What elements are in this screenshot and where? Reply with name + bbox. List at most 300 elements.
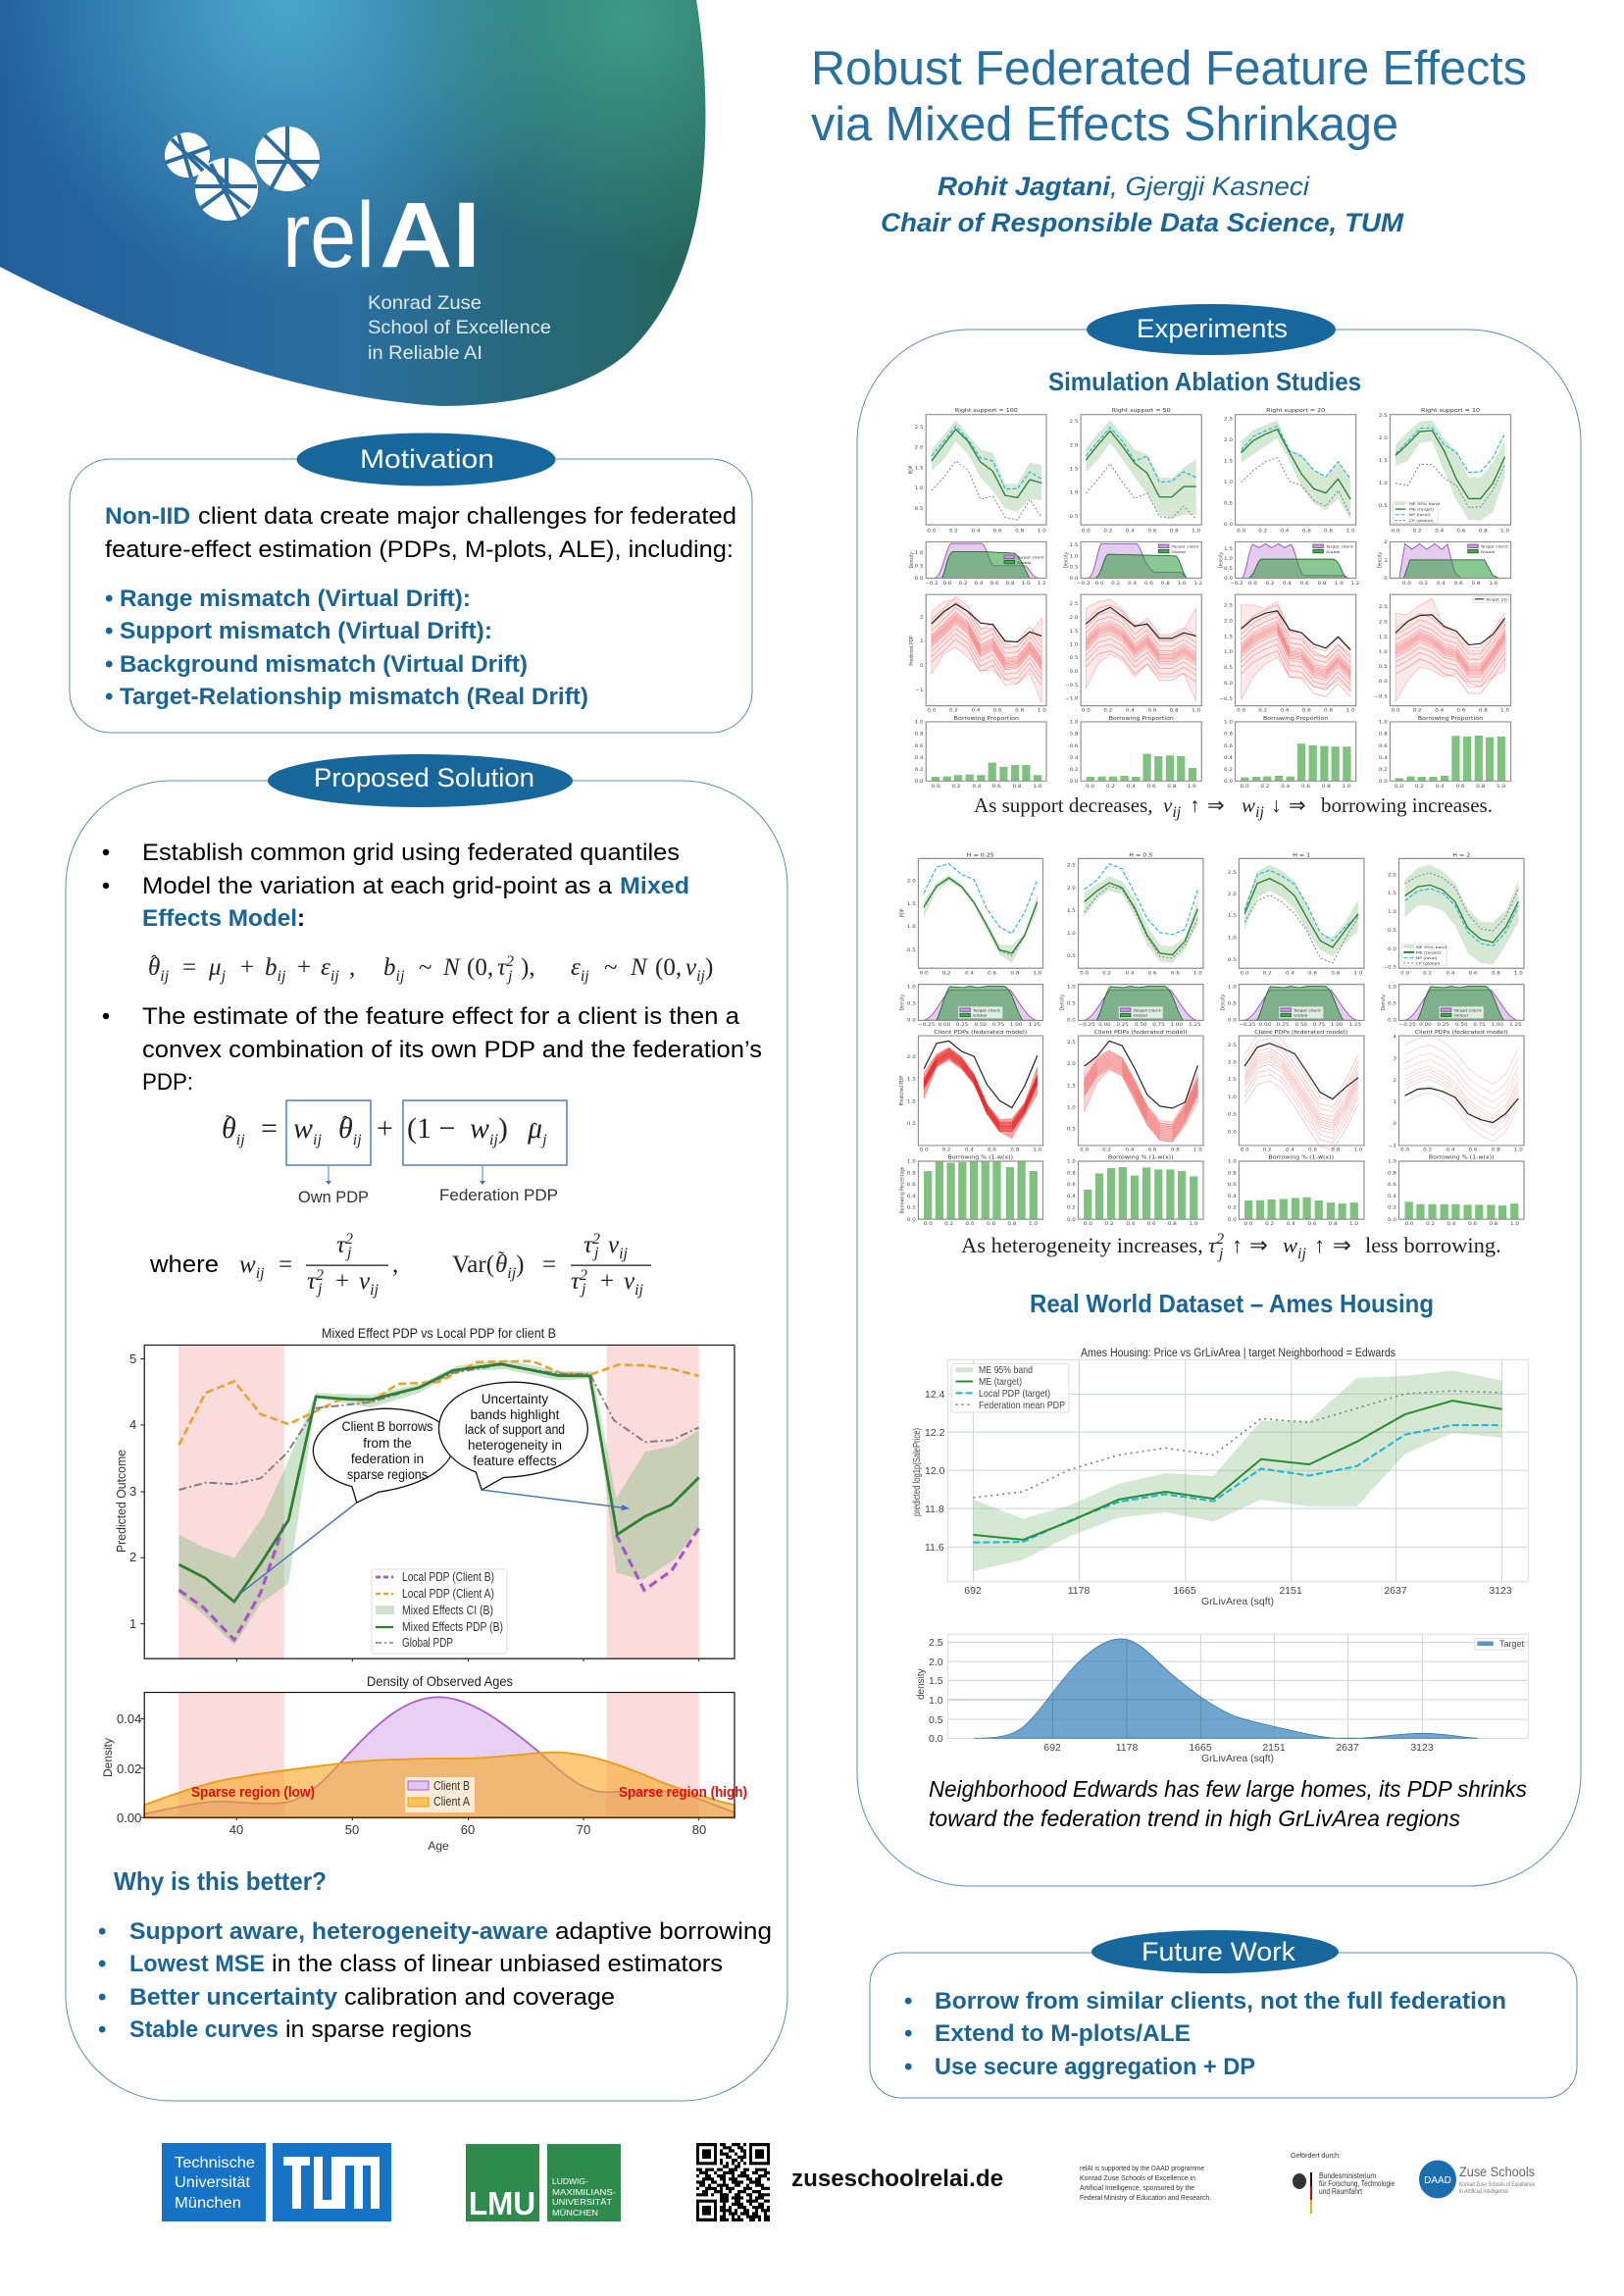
row: borrowing percentage bars: 0.2 [907,1205,916,1210]
formula: weights and variance: = [279,1251,292,1278]
row: client PDP fans: 1.0 [1192,708,1200,713]
row: borrowing proportion bars: 0.8 [1167,785,1176,790]
title [811,42,1527,151]
row: support densities: 0.5 [1224,567,1233,572]
row: borrowing proportion bars: 0.2 [1415,785,1424,790]
box: own PDP term [286,1100,371,1206]
row: PDP curves by right support: 0.4 [1126,529,1135,534]
row: support densities: 1.2 [1038,581,1046,587]
callout shape: uncertainty [439,1382,587,1490]
row: H densities: 1.0 [1388,985,1396,990]
logo: DAAD Zuse Schools [1419,2160,1536,2199]
chart title: Ames Housing: Price vs GrLivArea | target Neighborhood = Edwards [1081,1348,1396,1359]
row: borrowing percentage bars: 0.0 [924,1222,933,1227]
logo: LMU Munich: MAXIMILIANS- [552,2187,616,2197]
row: borrowing percentage bars: 0.6 [1388,1183,1396,1188]
row: PDP curves by H: CP (global) [1416,961,1441,965]
row: client PDP fans by H: 0.2 [942,1148,951,1152]
row: PDP curves by right support: ME (target) [1409,507,1435,511]
row: client PDP fans: 2.5 [1379,605,1388,610]
formula: shrinkage estimator: ˆ [342,1113,349,1134]
row: borrowing proportion bars: 0.0 [1086,785,1094,790]
row: borrowing proportion bars: 0.8 [1379,732,1388,737]
row: PDP curves by right support: 0.8 [1324,529,1333,534]
row: PDP curves by right support: 1.5 [1379,459,1388,464]
row: client PDP fans: 0.5 [1070,656,1079,661]
row: borrowing percentage bars: 0.2 [1265,1222,1274,1227]
row: borrowing percentage bars: 1.0 [907,1159,916,1164]
row: borrowing percentage bars: 0.0 [1228,1217,1237,1222]
formula: shrinkage estimator: w [470,1112,489,1145]
row: borrowing percentage bars: 0.2 [944,1222,953,1227]
row: borrowing percentage bars: 0.6 [987,1222,995,1227]
row: borrowing percentage bars: 0.6 [1067,1183,1076,1188]
axis labels: 12.0 [925,1465,945,1477]
row: H densities: 1.25 [1189,1023,1201,1028]
chart grid: support ablation [908,409,1511,790]
row: support densities: 0.0 [1070,576,1079,582]
row: PDP curves by right support: 1.0 [1224,481,1233,485]
formula: weights and variance: , [392,1251,398,1278]
heading pill: Future Work [1091,1930,1339,1973]
row: support densities: Global [1326,549,1340,554]
row: borrowing percentage bars: 1.0 [1349,1222,1358,1227]
row: support densities: 0.5 [1070,565,1079,570]
bullets: grid and model: Establish common grid using federated quantiles [142,840,680,866]
row: support densities: −0.2 [925,581,939,587]
axis labels: 3123 [1489,1585,1512,1597]
formula: weights and variance: v [624,1268,635,1295]
box: federation PDP term [403,1100,567,1204]
mismatch list [105,586,588,710]
row: H densities: −0.25 [1239,1023,1255,1028]
authors and affiliation: Chair of Responsible Data Science, TUM [881,208,1404,237]
formula: weights and variance: j [316,1281,323,1298]
row: borrowing proportion bars: 1.0 [1224,720,1233,725]
row: borrowing proportion bars: 1.0 [915,720,924,725]
row: H densities: Global [1453,1013,1468,1018]
future work list: • [904,1988,912,2015]
row: PDP curves by H: 2.5 [1067,863,1076,868]
row: client PDP fans: 0.8 [1324,708,1333,713]
formula: mixed effects model: = [182,954,196,981]
logo wordmark: rel [282,183,375,287]
heading pill: Experiments [1087,304,1336,355]
row: client PDP fans by H: 1.0 [1033,1148,1041,1152]
y axis labels [115,1352,136,1631]
legend: density chart: Client B [433,1779,470,1793]
row: H densities: 0.00 [1419,1023,1432,1028]
row: client PDP fans: 0.2 [1258,708,1267,713]
row: H densities: Target client [972,1008,1000,1012]
row: client PDP fans: 0.0 [1392,708,1400,713]
y axis labels: 3 [129,1484,136,1499]
row: H densities: 0.0 [1228,1018,1237,1023]
density axes and legend text: density [916,1668,927,1700]
row: PDP curves by right support: 0.4 [972,529,980,534]
row: PDP curves by H: PDP [899,909,906,917]
density axes: 40 [229,1822,243,1837]
row: client PDP fans: −0.5 [1219,697,1233,702]
row: client PDP fans by H: 0.0 [1228,1130,1237,1135]
benefits list: adaptive borrowing [555,1918,772,1945]
row: support densities: 2 [1384,540,1388,545]
row: PDP curves by H: 0.0 [920,971,929,976]
row: PDP curves by H: 0.8 [1331,971,1340,976]
website URL: zuseschoolrelai.de [791,2166,1003,2192]
funding note [1080,2166,1211,2202]
row: PDP curves by H: 0.8 [1010,971,1019,976]
sparse region labels: Sparse region (low) [191,1784,315,1801]
row: client PDP fans: 2 [920,615,924,620]
formula: shrinkage estimator: j [540,1132,547,1148]
row: borrowing proportion bars: 0.0 [1241,785,1249,790]
row: H densities: 1.00 [1170,1023,1183,1028]
density axes and legend text: 3123 [1410,1742,1434,1754]
formula: mixed effects model: θ [148,954,160,981]
row: borrowing proportion bars: 0.8 [1322,785,1331,790]
logo: LMU Munich: LUDWIG- [552,2176,588,2186]
row: PDP curves by H: H = 0.25 [967,853,994,858]
row: support densities: 1.0 [915,550,924,556]
row: client PDP fans by H: 0.4 [1126,1148,1134,1152]
row: borrowing proportion bars: 0.2 [1260,785,1269,790]
row: client PDP fans: 1.5 [1379,635,1388,640]
funding note: Federal Ministry of Education and Research. [1080,2195,1211,2202]
row: support densities: Global [1481,549,1495,554]
row: client PDP fans by H: 2.5 [1067,1041,1076,1046]
mismatch list: • [105,618,113,644]
row: borrowing percentage bars: Borrowing % (1-w(x)) [1429,1155,1495,1160]
row: PDP curves by H: 0.2 [1423,971,1432,976]
row: support densities: 0.4 [975,581,983,587]
row: PDP curves by H: H = 0.5 [1129,853,1153,858]
formula: weights and variance: 2 [592,1231,600,1248]
axis labels [912,1389,1512,1607]
formula caption: heterogeneity: ⇒ [1333,1233,1351,1257]
row: H densities: Density [1380,995,1387,1010]
row: PDP curves by right support: 0.2 [1103,529,1112,534]
chart: density of observed ages [101,1673,747,1853]
formula: shrinkage estimator: μ [527,1112,542,1145]
formula: weights and variance: 2 [316,1267,324,1284]
formula: mixed effects model: ) [705,954,713,981]
row: PDP curves by H: 1.0 [1033,971,1041,976]
formula: shrinkage estimator: ij [353,1132,362,1148]
benefits list: • [98,2016,106,2043]
row: borrowing percentage bars: 0.8 [1168,1222,1177,1227]
formula: weights and variance: ij [634,1282,644,1299]
logo: Technical University of Munich [162,2143,391,2221]
row: client PDP fans by H: 0.8 [1171,1148,1180,1152]
chart: GrLivArea density [916,1634,1528,1764]
row: client PDP fans by H: 2.5 [1228,1044,1237,1048]
density axes: 0.04 [117,1711,141,1726]
row: client PDP fans by H: 0.8 [1492,1148,1500,1152]
row: borrowing proportion bars: 0.2 [952,785,961,790]
formula: mixed effects model: (0, [467,954,493,981]
formula: mixed effects model: ij [696,968,706,985]
row: PDP curves by H: 0.4 [1286,971,1294,976]
density axes and legend text: GrLivArea (sqft) [1201,1753,1274,1764]
row: support densities: 1.2 [1350,581,1359,587]
row: borrowing percentage bars: 0.6 [1228,1183,1237,1188]
row: PDP curves by right support: 0.6 [1302,529,1311,534]
row: H densities: 0.25 [956,1023,968,1028]
formula: shrinkage estimator: w [293,1112,313,1145]
row: PDP curves by H: 0.5 [1228,958,1237,963]
row: support densities: 0.2 [1419,581,1428,587]
logo: DAAD Zuse Schools: in Artificial Intelligence [1459,2189,1509,2195]
density axes: Age [428,1839,449,1853]
formula: weights and variance: = [542,1251,556,1278]
mismatch list: • [105,684,113,710]
bullets: grid and model: Mixed [620,873,689,899]
row: PDP curves by right support: 0.8 [1015,529,1024,534]
callout text: uncertainty: heterogeneity in [468,1438,562,1453]
row: PDP curves by right support: 0.8 [1479,529,1488,534]
logo: LMU Munich: UNIVERSITÄT [552,2197,612,2207]
row: PDP curves by right support: 1.5 [1224,459,1233,464]
formula: shrinkage estimator: θ [338,1112,353,1145]
benefits list: in the class of linear unbiased estimators [272,1951,723,1977]
row: borrowing proportion bars: 1.0 [1033,785,1041,790]
row: client PDP fans by H: 0.6 [988,1148,996,1152]
row: borrowing percentage bars: 0.2 [1228,1205,1237,1210]
row: borrowing percentage bars: 0.6 [907,1183,916,1188]
row: borrowing percentage bars: 0.2 [1426,1222,1435,1227]
box: federation PDP term: Federation PDP [439,1186,558,1204]
row: borrowing percentage bars: 1.0 [1029,1222,1038,1227]
row: PDP curves by right support: Right support = 20 [1266,409,1326,414]
row: client PDP fans by H: 0.0 [1241,1148,1249,1152]
row: client PDP fans: 0.6 [993,708,1002,713]
row: support densities: 1.0 [1335,581,1344,587]
axis labels: 12.2 [925,1427,945,1439]
row: borrowing proportion bars: 0.6 [915,744,924,749]
density axes and legend text [916,1637,1525,1764]
row: client PDP fans: 0.0 [1224,682,1233,687]
row: client PDP fans: 0.0 [1379,680,1388,685]
row: PDP curves by right support: NP (local) [1409,513,1431,517]
row: H densities: Global [1133,1013,1147,1018]
row: H densities: 1.25 [1509,1023,1522,1028]
row: borrowing percentage bars [899,1155,1524,1227]
row: client PDP fans: 0.6 [1302,708,1311,713]
axis labels: 2151 [1279,1585,1302,1597]
row: borrowing proportion bars: 0.0 [1395,785,1403,790]
callout text: borrowing: sparse regions [347,1467,428,1482]
row: client PDP fans: 0.4 [1280,708,1289,713]
formula caption: heterogeneity: τ [1208,1233,1217,1257]
row: H densities: −0.25 [918,1023,935,1028]
formula caption: heterogeneity: ij [1297,1246,1306,1262]
legend: main chart: Mixed Effects CI (B) [402,1604,493,1617]
row: client PDP fans by H: −1 [1389,1144,1396,1148]
logo: federal ministry: für Forschung, Technologie [1319,2179,1395,2188]
formula: mixed effects model: N [442,954,461,981]
row: client PDP fans: 0.4 [972,708,980,713]
row: client PDP fans by H: 0.5 [907,1121,916,1127]
formula caption: heterogeneity: less borrowing. [1365,1233,1501,1257]
density axes and legend text: 1.0 [929,1695,943,1707]
legend: main chart: Mixed Effects PDP (B) [402,1620,503,1634]
formula: weights and variance: ij [507,1265,517,1282]
panel: proposed solution [66,754,787,2101]
legend text [979,1364,1065,1411]
row: PDP curves by right support: ME 95% band [1409,502,1441,506]
row: PDP curves by right support: 1.0 [1379,482,1388,486]
row: support densities: Density [1218,552,1225,568]
formula: mixed effects model: , [349,954,355,981]
density axes and legend text: 0.5 [929,1714,943,1726]
row: client PDP fans by H: 1.0 [1353,1148,1362,1152]
row: client PDP fans by H: 0.6 [1308,1148,1317,1152]
row: client PDP fans by H: 1.0 [907,1099,916,1104]
formula caption: support ablation: As support decreases, [974,793,1153,817]
formula: mixed effects model: N [630,954,648,981]
callout text: borrowing [341,1419,433,1482]
formula caption: support ablation: ⇒ [1289,793,1306,817]
row: client PDP fans by H: 0.5 [1067,1127,1076,1132]
row: H densities: 0.25 [1116,1023,1129,1028]
row: PDP curves by H: 0.0 [1400,971,1409,976]
row: PDP curves by right support: CP (global) [1409,518,1434,523]
axis labels: predicted log1p(SalePrice) [912,1428,923,1516]
row: client PDP fans by H: Client PDPs (federated model) [1094,1031,1188,1036]
axis labels: 692 [964,1585,982,1597]
callout text: uncertainty: Uncertainty [482,1392,548,1406]
formula: weights and variance: Var( [452,1251,494,1278]
row: PDP curves by H [899,853,1524,976]
row: H densities [899,985,1524,1028]
row: support densities: 0.6 [990,581,999,587]
row: borrowing proportion bars: 0.6 [1070,744,1079,749]
axis labels: GrLivArea (sqft) [1201,1596,1274,1607]
bullet: convex combination: The estimate of the feature effect for a client is then a [142,1003,740,1030]
row: client PDP fans by H: 0.8 [1331,1148,1340,1152]
axis labels: 1665 [1173,1585,1196,1597]
legend: main chart: Local PDP (Client B) [402,1570,494,1584]
heading: why is this better: Why is this better? [114,1866,327,1896]
density axes and legend text: 1178 [1116,1742,1138,1754]
row: PDP curves by right support: 2.5 [1379,414,1388,419]
row: client PDP fans: −0.5 [1065,683,1079,689]
formula: mixed effects model: ij [396,968,405,985]
caption: Edwards neighbourhood: toward the federation trend in high GrLivArea regions [929,1806,1460,1831]
row: PDP curves by right support: 1.0 [1500,529,1509,534]
formula: mixed effects model: ε [321,954,330,981]
row: PDP curves by H: −0.5 [1383,965,1396,970]
row: client PDP fans: −1 [915,689,924,693]
row: H densities: 0.75 [992,1023,1004,1028]
row: client PDP fans: 2.5 [1070,602,1079,607]
row: support densities: 0.8 [1318,581,1326,587]
density axes and legend text: 2151 [1262,1742,1286,1754]
formula: mixed effects model: ˆ [151,952,158,973]
benefits list: Lowest MSE [129,1951,265,1977]
chart title: Density of Observed Ages [367,1673,513,1689]
row: H densities: Global [973,1013,987,1018]
logo: federal ministry [1291,2151,1395,2214]
row: client PDP fans: 0.5 [1379,665,1388,670]
row: PDP curves by right support: 1.0 [1192,529,1200,534]
row: borrowing percentage bars: 0.4 [965,1222,974,1227]
row: PDP curves by right support: 2.5 [915,426,924,431]
formula: mixed effects model: ~ [419,954,432,981]
row: borrowing proportion bars: 0.2 [1070,768,1079,773]
formula: mixed effects model: ), [521,954,535,981]
axis labels: 2637 [1384,1585,1407,1597]
row: client PDP fans by H: 1.0 [1193,1148,1202,1152]
row: H densities: 1.0 [1067,985,1076,990]
row: H densities: 0.5 [1388,1001,1396,1006]
formula: mixed effects model: μ [208,954,222,981]
row: support densities: 0 [1384,576,1388,582]
formula caption: support ablation: ij [1255,804,1264,821]
logo subtitle: Konrad Zuse [368,292,482,314]
row: PDP curves by right support: 0.5 [1070,514,1079,519]
row: client PDP fans: 0.8 [1479,708,1488,713]
row: support densities: Density [908,552,915,568]
formula: weights and variance: ) [516,1251,524,1278]
row: PDP curves by H: 1.5 [907,901,916,907]
density axes and legend text: 692 [1043,1742,1061,1754]
logo: federal ministry: und Raumfahrt [1319,2187,1363,2196]
authors and affiliation [881,172,1404,237]
density axes and legend text: 2.5 [929,1637,943,1649]
row: PDP curves by right support: 2.0 [1070,443,1079,448]
row: PDP curves by H: 2.0 [1067,886,1076,891]
box: own PDP term: Own PDP [298,1188,369,1206]
formula: mixed effects model: ij [160,968,170,985]
row: H densities: Density [1059,995,1066,1010]
row: borrowing percentage bars: 0.4 [1388,1195,1396,1199]
row: client PDP fans: 1.0 [1346,708,1355,713]
future work list: • [904,2020,912,2047]
row: client PDP fans: 0.2 [1413,708,1422,713]
row: support densities: 0.2 [1266,581,1275,587]
row: support densities: 0.4 [1283,581,1292,587]
formula: weights and variance: j [580,1281,586,1298]
funding note: Artificial Intelligence, sponsored by the [1080,2185,1194,2192]
density axes and legend text: 0.0 [929,1733,943,1745]
row: PDP curves by H: 0.4 [1126,971,1134,976]
row: PDP curves by right support: 1.0 [1346,529,1355,534]
row: H densities: 1.25 [1349,1023,1361,1028]
row: client PDP fans: 0.8 [1015,708,1024,713]
intro text: client data create major challenges for federated [198,503,736,530]
row: borrowing percentage bars: 0.2 [1388,1205,1396,1210]
formula: mixed effects model: τ [497,954,507,981]
row: PDP curves by H: 0.8 [1492,971,1500,976]
row: PDP curves by right support: 1.5 [915,466,924,471]
row: borrowing proportion bars: 0.8 [1476,785,1485,790]
row: H densities: −0.25 [1399,1023,1416,1028]
formula: weights and variance: ij [619,1246,629,1262]
legend: main chart: Local PDP (Client A) [402,1587,494,1601]
logo: LMU Munich: LMU [469,2185,535,2221]
row: PDP curves by right support: 0.8 [1170,529,1179,534]
formula: weights and variance: v [359,1268,371,1295]
row: client PDP fans: 1.0 [1070,642,1079,647]
row: support densities: 0.0 [942,581,951,587]
row: H densities: Target client [1293,1008,1321,1012]
formula: mixed effects model: ε [571,954,581,981]
row: support densities: 1.0 [1177,581,1186,587]
row: PDP curves by right support: 1.5 [1070,467,1079,472]
row: borrowing percentage bars: 0.4 [1228,1195,1237,1199]
